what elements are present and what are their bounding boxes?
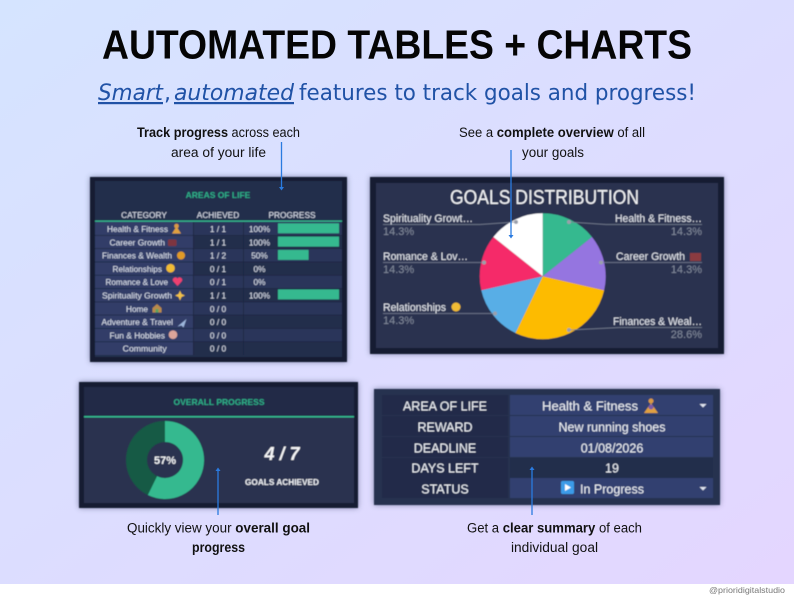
progress percentages: 0%: [254, 264, 266, 274]
chart title: GOALS DISTRIBUTION: [450, 187, 639, 209]
subtitle: automated: [174, 81, 295, 106]
labels: DEADLINE: [414, 442, 476, 456]
achieved values: 0 / 1: [210, 264, 226, 274]
pie labels right: 28.6%: [671, 329, 702, 341]
pie labels left: 14.3%: [383, 315, 414, 327]
caption: track progress: Track progress across each: [137, 125, 300, 140]
progress percentages: 50%: [251, 251, 268, 261]
values: New running shoes: [558, 420, 666, 434]
caption: complete overview: your goals: [522, 145, 584, 160]
progress percentages: 100%: [249, 290, 271, 300]
pie labels left: [383, 213, 473, 327]
title: AUTOMATED TABLES + CHARTS: [102, 22, 692, 68]
values: 01/08/2026: [581, 442, 643, 456]
table header row: ACHIEVED: [197, 210, 239, 220]
achieved values: 1 / 1: [210, 237, 226, 247]
progress percentages: [249, 224, 271, 300]
progress percentages: 0%: [254, 277, 266, 287]
caption: clear summary: individual goal: [511, 540, 598, 555]
caption: overall goal progress: [127, 520, 310, 555]
achieved values: 0 / 0: [210, 330, 226, 340]
dropdown arrows: [700, 404, 706, 490]
progress percentages: 100%: [249, 224, 271, 234]
achieved values: 0 / 1: [210, 277, 226, 287]
category labels: Spirituality Growth: [102, 290, 172, 300]
watermark: @prioridigitalstudio: [709, 585, 785, 595]
pie labels right: 14.3%: [671, 264, 702, 276]
labels: DAYS LEFT: [411, 462, 479, 476]
pie labels right: 14.3%: [671, 226, 702, 238]
caption: clear summary: [467, 520, 642, 555]
subtitle: features to track goals and progress!: [299, 81, 696, 106]
icon: play status: [561, 481, 574, 494]
achieved values: 0 / 0: [210, 344, 226, 354]
subtitle: ,: [164, 81, 171, 106]
category labels: Career Growth: [110, 237, 165, 247]
donut chart: [136, 431, 194, 488]
caption: track progress: area of your life: [171, 145, 266, 160]
arrow: to areas table: [279, 142, 284, 190]
pie labels left: Spirituality Growt…: [383, 213, 473, 225]
pie labels left: 14.3%: [383, 226, 414, 238]
category labels: [102, 224, 173, 354]
value column: [510, 395, 713, 498]
caption: overall goal progress: progress: [192, 540, 245, 555]
pie labels right: Health & Fitness…: [615, 213, 702, 225]
category labels: Health & Fitness: [107, 224, 168, 234]
category labels: Community: [123, 344, 168, 354]
pie labels right: Finances & Weal…: [613, 316, 702, 328]
progress bars: [278, 223, 339, 299]
pie leader lines: [383, 220, 702, 332]
caption: complete overview: [459, 125, 645, 160]
category column: [95, 222, 193, 355]
icon: meditating person: [644, 398, 658, 413]
category labels: Finances & Wealth: [102, 251, 172, 261]
goals achieved stat: [245, 444, 319, 487]
caption: clear summary: Get a clear summary of each: [467, 520, 642, 536]
caption: track progress: [137, 125, 300, 160]
values: In Progress: [580, 482, 644, 496]
pie labels right: [613, 213, 702, 341]
labels: STATUS: [421, 482, 469, 496]
table heading: AREAS OF LIFE: [186, 190, 251, 200]
values: 19: [605, 462, 619, 476]
arrow: to pie chart: [508, 150, 514, 238]
category labels: Fun & Hobbies: [110, 330, 165, 340]
pie labels right: Career Growth: [616, 251, 685, 263]
subtitle: [98, 81, 696, 106]
achieved values: [210, 224, 226, 354]
table header row: CATEGORY: [121, 210, 167, 220]
category labels: Romance & Love: [106, 277, 168, 287]
category icons: [152, 224, 186, 339]
caption: complete overview: See a complete overview of all: [459, 125, 645, 140]
panel: overall progress: [79, 382, 358, 508]
pie labels left: Romance & Lov…: [383, 251, 468, 263]
subtitle: Smart: [98, 81, 164, 106]
panel: areas of life table: [90, 177, 347, 362]
progress percentages: 100%: [249, 237, 271, 247]
achieved values: 0 / 0: [210, 304, 226, 314]
table rows background: [193, 222, 342, 341]
pie chart: [480, 213, 606, 339]
values: Health & Fitness: [542, 400, 638, 414]
category labels: Relationships: [112, 264, 162, 274]
category labels: Home: [126, 304, 148, 314]
table header row: [121, 210, 316, 220]
caption: overall goal progress: Quickly view your overall goal: [127, 520, 310, 536]
table header row: PROGRESS: [268, 210, 316, 220]
achieved values: 1 / 2: [210, 251, 226, 261]
donut chart: 57%: [154, 455, 176, 467]
goals achieved stat: 4 / 7: [263, 444, 300, 464]
labels: [403, 400, 487, 496]
pie labels left: Relationships: [383, 302, 446, 314]
achieved values: 1 / 1: [210, 224, 226, 234]
label column: [382, 395, 508, 498]
achieved values: 1 / 1: [210, 290, 226, 300]
arrow: to overall progress: [216, 468, 220, 515]
pie labels left: 14.3%: [383, 264, 414, 276]
heading: OVERALL PROGRESS: [174, 397, 265, 407]
goals achieved stat: GOALS ACHIEVED: [245, 477, 319, 487]
labels: REWARD: [417, 420, 473, 434]
panel: goals distribution: [370, 177, 724, 354]
category labels: Adventure & Travel: [102, 317, 173, 327]
arrow: to goal summary: [530, 466, 534, 515]
values: [542, 400, 666, 496]
panel: goal summary: [374, 389, 720, 505]
labels: AREA OF LIFE: [403, 400, 487, 414]
achieved values: 0 / 0: [210, 317, 226, 327]
